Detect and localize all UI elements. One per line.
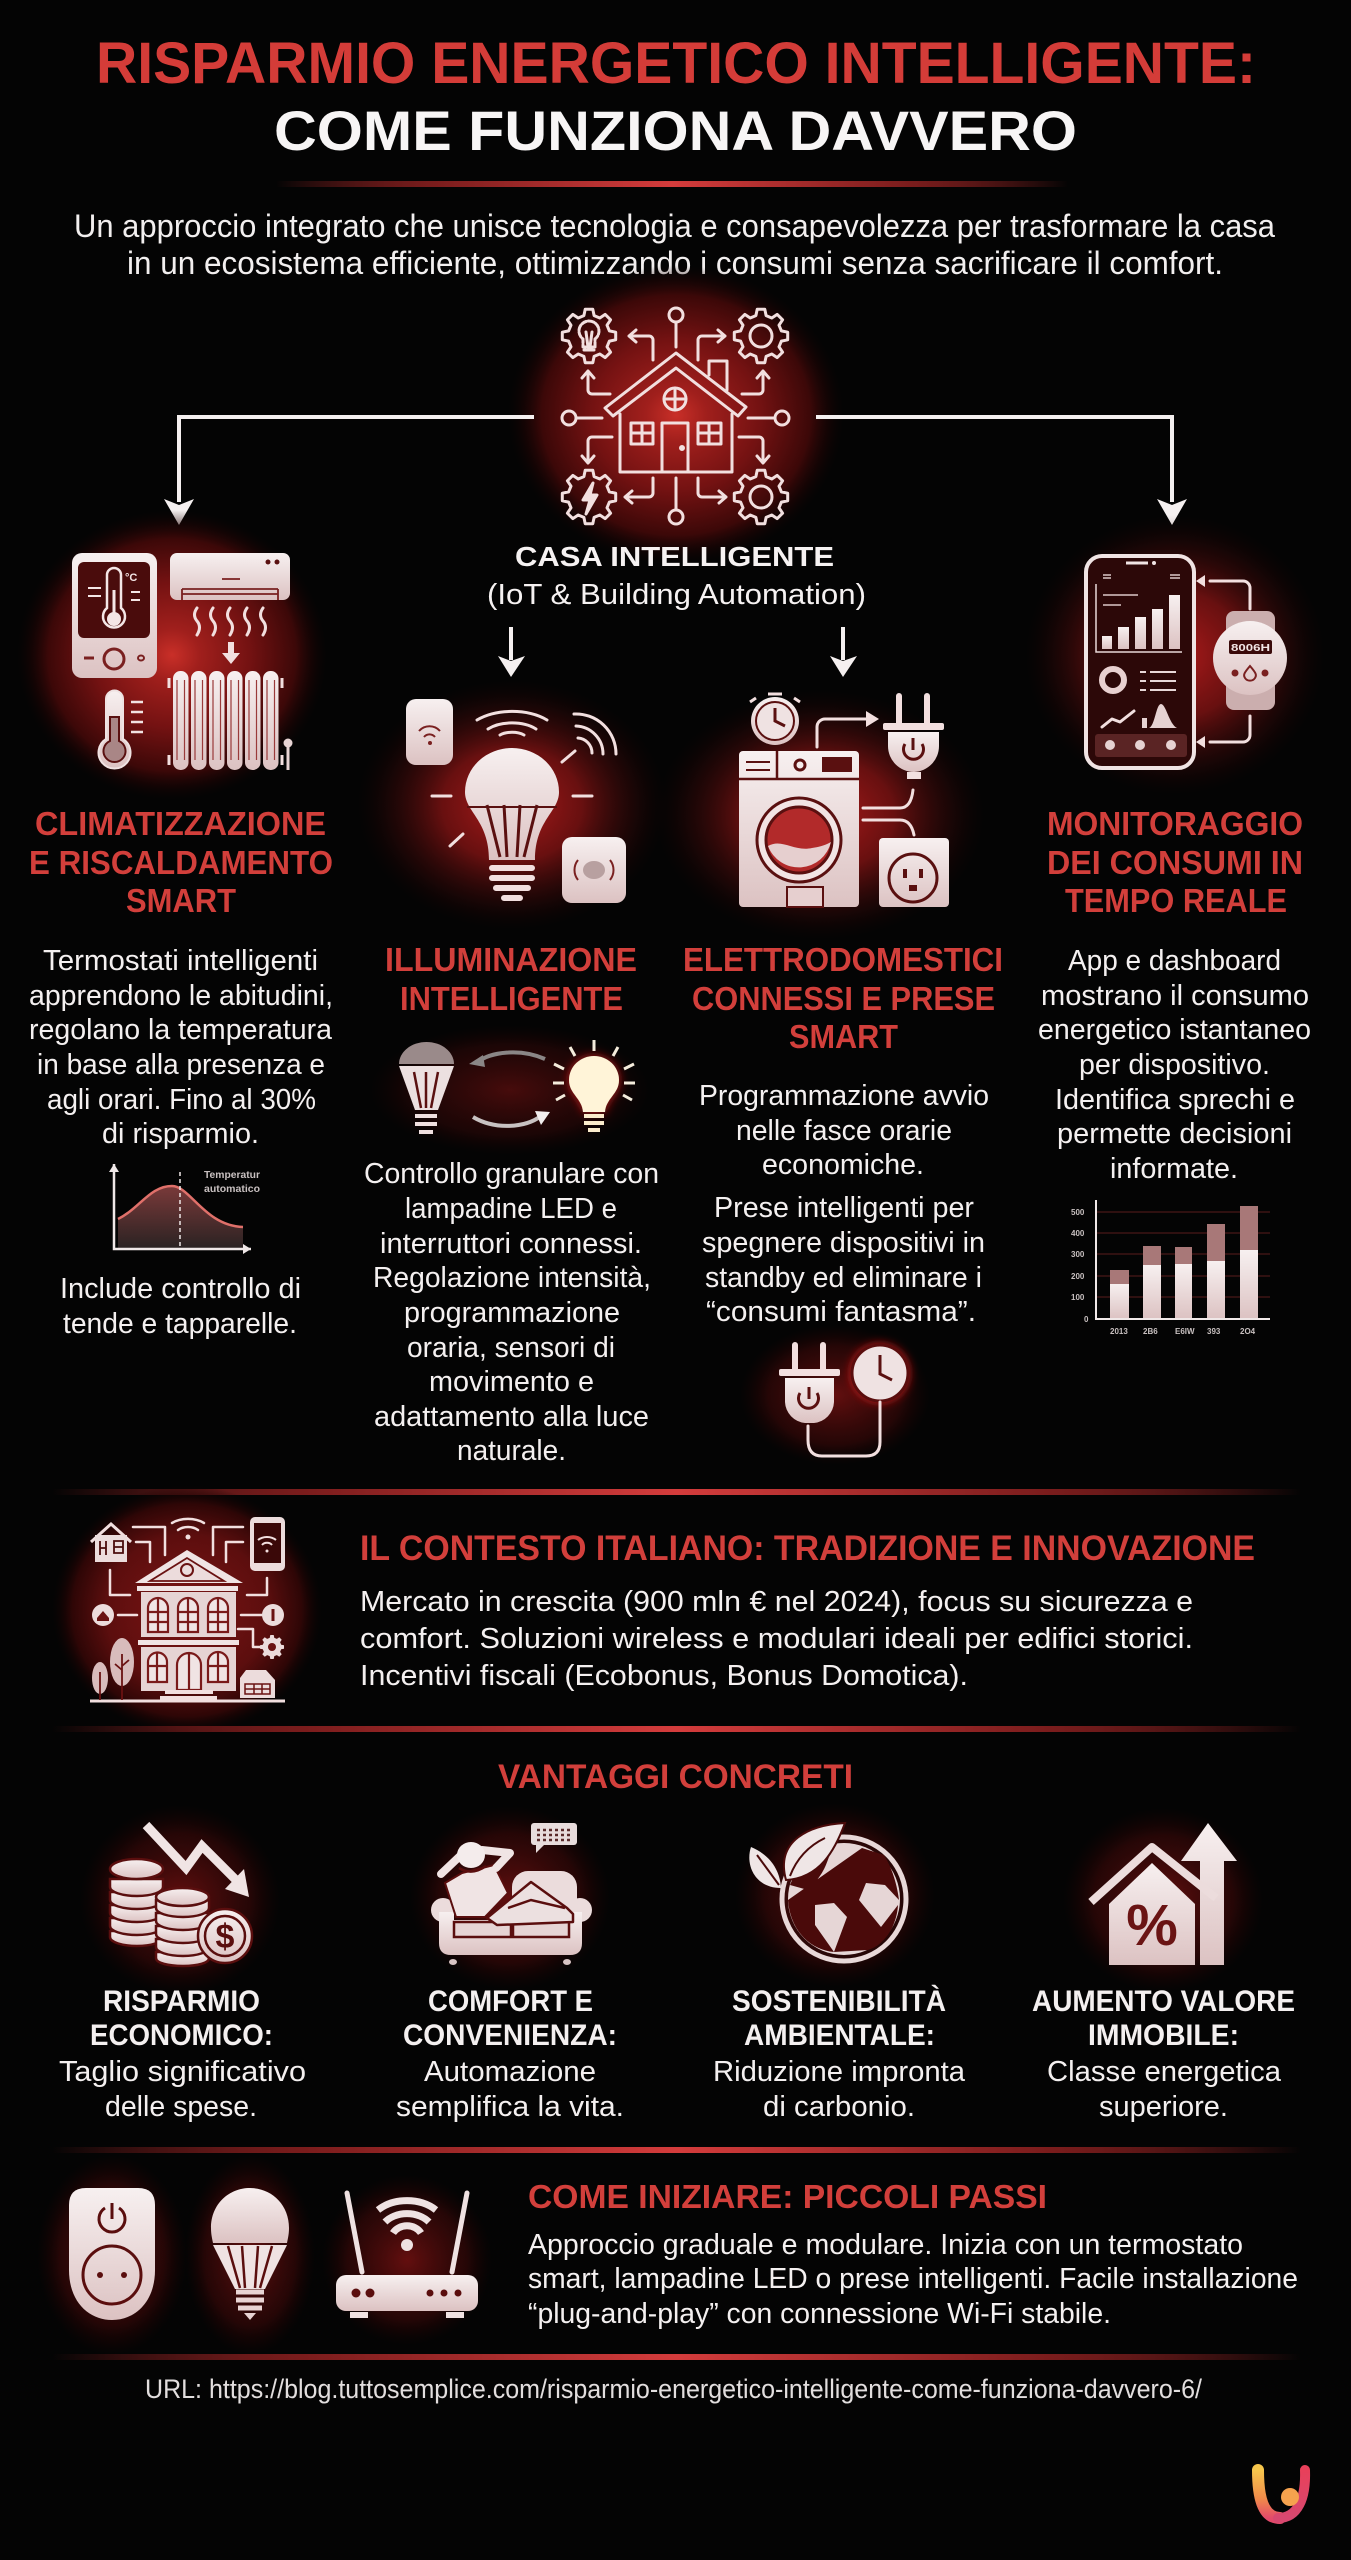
icon: phone dashboard and meter: 8006H — [1231, 643, 1270, 654]
text: climate description: apprendono le abitudini, — [29, 980, 333, 1012]
heading: lighting: ILLUMINAZIONE — [385, 941, 637, 978]
heading: lighting: INTELLIGENTE — [400, 980, 623, 1017]
panel: getting started — [37, 2155, 1298, 2355]
panel: italian context — [52, 1485, 1255, 1735]
text: lighting description: interruttori connessi. — [380, 1228, 642, 1260]
heading: climate: CLIMATIZZAZIONE — [35, 805, 326, 842]
chart: consumption bars: 300 — [1071, 1250, 1085, 1259]
chart: consumption bars: 393 — [1207, 1327, 1221, 1336]
arrow: to lighting — [498, 627, 525, 677]
text: monitoring description: energetico istantaneo — [1038, 1014, 1311, 1046]
subtitle — [74, 208, 1275, 281]
hub label — [487, 541, 866, 611]
text: climate note: tende e tapparelle. — [63, 1308, 297, 1340]
text: economic saving: Taglio significativo — [59, 2056, 306, 2088]
text: sustainability: SOSTENIBILITÀ — [732, 1984, 946, 2018]
text: lighting description: adattamento alla luce — [374, 1401, 649, 1433]
source URL: URL: https://blog.tuttosemplice.com/risparmio-energetico-intelligente-come-funziona-davvero-6/ — [145, 2374, 1202, 2404]
heading: monitoring: DEI CONSUMI IN — [1047, 844, 1303, 881]
text: appliances description: nelle fasce orarie — [736, 1115, 952, 1147]
icon: wifi router — [322, 2175, 492, 2345]
text: appliances description — [699, 1080, 989, 1328]
logo — [1258, 2470, 1305, 2518]
heading: climate — [29, 805, 333, 919]
icon: smart socket — [37, 2155, 187, 2355]
text: climate description: Termostati intelligenti — [43, 945, 318, 977]
text: sustainability: AMBIENTALE: — [744, 2019, 935, 2052]
text: getting started description: Approccio graduale e modulare. Inizia con un termostato — [528, 2229, 1243, 2261]
panel: comfort — [396, 1806, 624, 2123]
hub label: CASA INTELLIGENTE — [515, 541, 834, 572]
text: appliances description: spegnere dispositivi in — [702, 1227, 985, 1259]
text: economic saving: delle spese. — [105, 2091, 257, 2123]
arrow: hub to monitoring — [816, 417, 1187, 525]
text: lighting description: programmazione — [404, 1297, 620, 1329]
text: economic saving: ECONOMICO: — [90, 2019, 273, 2052]
heading: climate: E RISCALDAMENTO — [29, 844, 333, 881]
text: lighting description: Regolazione intensità, — [373, 1262, 651, 1294]
text: getting started description: smart, lampadine LED o prese intelligenti. Facile installazione — [528, 2263, 1298, 2295]
subtitle: Un approccio integrato che unisce tecnologia e consapevolezza per trasformare la casa — [74, 208, 1275, 244]
chart: consumption bars — [1071, 1200, 1270, 1336]
text: appliances description: standby ed eliminare i — [705, 1262, 982, 1294]
chart: consumption bars: 2013 — [1110, 1327, 1128, 1336]
text: sustainability: di carbonio. — [763, 2091, 915, 2123]
text: italian context description — [360, 1586, 1193, 1692]
icon: person relaxing on sofa — [410, 1806, 610, 1990]
chart: consumption bars: 2B6 — [1143, 1327, 1158, 1336]
icon: historic building with smart devices — [52, 1485, 322, 1735]
text: appliances description: “consumi fantasma”. — [706, 1296, 976, 1328]
text: appliances description: economiche. — [762, 1149, 924, 1181]
text: climate description: di risparmio. — [102, 1118, 259, 1150]
text: sustainability — [713, 1984, 966, 2123]
text: monitoring description: App e dashboard — [1068, 945, 1281, 977]
panel: appliances — [655, 627, 1003, 1465]
heading: appliances: SMART — [789, 1018, 898, 1055]
icon: phone dashboard and meter — [1025, 515, 1325, 795]
heading: monitoring: TEMPO REALE — [1065, 882, 1287, 919]
heading: lighting — [385, 941, 637, 1017]
text: monitoring description: permette decisioni — [1057, 1118, 1292, 1150]
icon: plug with timer — [740, 1325, 930, 1465]
text: lighting description: naturale. — [457, 1435, 566, 1467]
heading: getting started: COME INIZIARE: PICCOLI PASSI — [528, 2178, 1047, 2215]
panel: property value — [1032, 1808, 1295, 2123]
chart: automatic temperature curve: automatico — [204, 1184, 260, 1195]
text: monitoring description — [1038, 945, 1311, 1185]
panel: sustainability — [713, 1803, 966, 2123]
heading: appliances: CONNESSI E PRESE — [692, 980, 995, 1017]
text: climate description — [29, 945, 333, 1150]
text: comfort: COMFORT E — [428, 1985, 593, 2018]
icon: LED bulb — [185, 2155, 315, 2355]
chart: consumption bars: 0 — [1084, 1315, 1089, 1324]
hub label: (IoT & Building Automation) — [487, 579, 866, 611]
text: italian context description: comfort. Soluzioni wireless e modulari ideali per edifici storici. — [360, 1623, 1193, 1655]
text: lighting description: Controllo granulare con — [364, 1158, 659, 1190]
text: climate description: agli orari. Fino al 30% — [47, 1084, 316, 1116]
text: property value: IMMOBILE: — [1088, 2019, 1239, 2052]
text: property value: AUMENTO VALORE — [1032, 1985, 1295, 2018]
text: economic saving — [59, 1985, 306, 2123]
arrow: to appliances — [830, 627, 857, 677]
heading: italian context: IL CONTESTO ITALIANO: TRADIZIONE E INNOVAZIONE — [360, 1529, 1255, 1568]
chart: consumption bars: 100 — [1071, 1293, 1085, 1302]
text: property value: Classe energetica — [1047, 2056, 1282, 2088]
heading: benefits: VANTAGGI CONCRETI — [498, 1758, 853, 1796]
title: RISPARMIO ENERGETICO INTELLIGENTE: — [96, 31, 1256, 96]
text: lighting description: lampadine LED e — [405, 1193, 617, 1225]
text: climate note: Include controllo di — [60, 1273, 301, 1305]
text: italian context description: Incentivi fiscali (Ecobonus, Bonus Domotica). — [360, 1660, 968, 1692]
chart: consumption bars: 400 — [1071, 1229, 1085, 1238]
arrow: hub to climate — [164, 417, 534, 525]
heading: appliances: ELETTRODOMESTICI — [683, 941, 1003, 978]
heading: appliances — [683, 941, 1003, 1055]
chart: consumption bars: 500 — [1071, 1208, 1085, 1217]
text: monitoring description: informate. — [1110, 1153, 1238, 1185]
text: monitoring description: mostrano il consumo — [1041, 980, 1309, 1012]
chart: consumption bars: 2O4 — [1240, 1327, 1256, 1336]
panel: lighting — [357, 627, 667, 1467]
title: COME FUNZIONA DAVVERO — [274, 99, 1077, 162]
icon: smart home hub — [508, 265, 844, 565]
text: getting started description: “plug-and-play” con connessione Wi-Fi stabile. — [528, 2298, 1111, 2330]
text: economic saving: RISPARMIO — [103, 1985, 260, 2018]
panel: monitoring — [1025, 515, 1325, 1336]
text: climate description: regolano la temperatura — [29, 1014, 333, 1046]
title — [96, 31, 1256, 162]
text: monitoring description: per dispositivo. — [1079, 1049, 1270, 1081]
icon: thermostat and radiator — [17, 510, 327, 800]
icon: coins and falling arrow: $ — [216, 1918, 235, 1956]
chart: automatic temperature curve: Temperatur — [204, 1170, 260, 1181]
text: comfort: CONVENIENZA: — [403, 2019, 617, 2052]
subtitle: in un ecosistema efficiente, ottimizzando i consumi senza sacrificare il comfort. — [127, 245, 1223, 281]
text: italian context description: Mercato in crescita (900 mln € nel 2024), focus su sicurezza e — [360, 1586, 1193, 1618]
text: comfort: Automazione — [424, 2056, 596, 2088]
text: property value: superiore. — [1099, 2091, 1228, 2123]
text: sustainability: Riduzione impronta — [713, 2056, 966, 2088]
text: lighting description — [364, 1158, 659, 1467]
heading: monitoring: MONITORAGGIO — [1047, 805, 1303, 842]
icon: globe with leaves — [735, 1803, 935, 1987]
text: lighting description: oraria, sensori di — [407, 1332, 615, 1364]
text: appliances description: Prese intelligenti per — [714, 1192, 974, 1224]
icon: smart bulb — [357, 680, 667, 930]
text: getting started description — [528, 2229, 1298, 2330]
text: appliances description: Programmazione avvio — [699, 1080, 989, 1112]
text: climate note — [60, 1273, 301, 1340]
text: lighting description: movimento e — [429, 1366, 594, 1398]
icon: house value rising — [1063, 1808, 1263, 1992]
panel: climate — [17, 510, 333, 1340]
icon: coins and falling arrow — [80, 1805, 280, 1995]
icon: bulb off and on — [370, 1025, 650, 1155]
panel: economic saving — [59, 1805, 306, 2123]
text: property value — [1032, 1985, 1295, 2123]
chart: consumption bars: 200 — [1071, 1272, 1085, 1281]
heading: climate: SMART — [126, 882, 236, 919]
icon: washer and smart plug — [655, 690, 985, 940]
icon: thermostat and radiator: °C — [125, 572, 137, 584]
chart: consumption bars: E6IW — [1175, 1327, 1195, 1336]
text: monitoring description: Identifica sprechi e — [1055, 1084, 1295, 1116]
icon: house value rising: % — [1126, 1893, 1178, 1958]
heading: monitoring — [1047, 805, 1303, 919]
text: comfort: semplifica la vita. — [396, 2091, 624, 2123]
chart: automatic temperature curve — [109, 1164, 260, 1254]
text: comfort — [396, 1985, 624, 2123]
text: climate description: in base alla presenza e — [37, 1049, 325, 1081]
